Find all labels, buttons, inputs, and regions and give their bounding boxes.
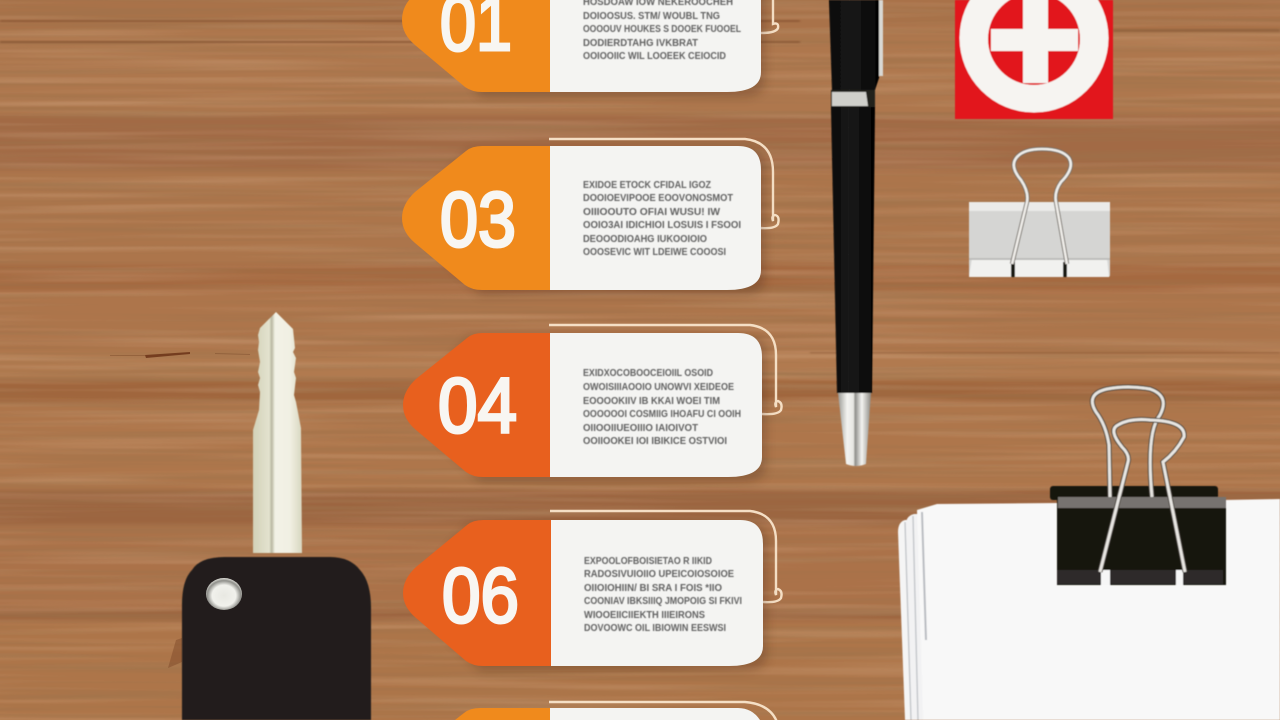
tag 04 number: 04 [438, 361, 517, 449]
tag 01 description [583, 0, 741, 62]
tag 04 description [583, 368, 741, 447]
tag 01 description: OOIOOIIC WIL LOOEEK CEIOCID [583, 51, 726, 62]
tag 04 description: OOIIOOKEI IOI IBIKICE OSTVIOI [583, 436, 727, 447]
tag 04 [403, 333, 762, 477]
tag 06 text card [551, 520, 763, 666]
icon: white binder clip [969, 149, 1110, 277]
tag 04 description: OWOISIIIAOOIO UNOWVI XEIDEOE [583, 382, 734, 393]
key fob [182, 557, 371, 720]
tag 03 number: 03 [440, 175, 516, 263]
tag 03 description [583, 180, 741, 258]
icon: red medical box [955, 0, 1113, 119]
connector wires behind tags [549, 0, 782, 720]
tag 03 description: DEOOODIOAHG IUKOOIOIO [583, 234, 707, 245]
tag 01 number tab [402, 0, 550, 92]
key blade [253, 312, 302, 553]
tag 06 description: OIIOIOHIIN/ BI SRA I FOIS *IIO [584, 583, 722, 594]
tag 06 description: EXPOOLOFBOISIETAO R IIKID [584, 556, 712, 567]
tag 04 text card [550, 333, 762, 477]
tag 06 number tab [403, 520, 551, 666]
tag 06 number: 06 [442, 551, 519, 639]
tag 06 description: COONIAV IBKSIIIQ JMOPOIG SI FKIVI [584, 596, 742, 607]
tag 01 [402, 0, 761, 92]
tag 03 text card [550, 146, 761, 290]
tag 03 description: OOOSEVIC WIT LDEIWE COOOSI [583, 247, 726, 258]
key fob screw [206, 578, 242, 610]
tag 04 description: EXIDXOCOBOOCEIOIIL OSOID [583, 368, 713, 379]
tag 03 description: OIIIOOUTO OFIAI WUSU! IW [583, 207, 721, 218]
tag 07 partially visible [455, 708, 760, 720]
tag 01 text card [550, 0, 761, 92]
tag 03 description: OOIO3AI IDICHIOI LOSUIS I FSOOI [583, 220, 741, 231]
tag 04 description: OOOOOOI COSMIIG IHOAFU CI OOIH [583, 409, 741, 420]
tag 03 description: EXIDOE ETOCK CFIDAL IGOZ [583, 180, 711, 191]
tag 03 description: DOOIOEVIPOOE EOOVONOSMOT [583, 193, 733, 204]
tag 06 description: RADOSIVUIOIIO UPEICOIOSOIOE [584, 569, 734, 580]
tag 04 description: OIIOOIIUEOIIIO IAIOIVOT [583, 423, 698, 434]
tag 06 description: WIOOEIICIIEKTH IIIEIRONS [584, 610, 705, 621]
tag 04 description: EOOOOKIIV IB KKAI WOEI TIM [583, 396, 720, 407]
tag 03 number tab [402, 146, 550, 290]
icon: car key [182, 312, 371, 720]
icon: paper stack [898, 499, 1280, 720]
tag 01 description: OOOOUV HOUKES S DOOEK FUOOEL [583, 24, 741, 35]
tag 04 number tab [403, 333, 550, 477]
tag 03 [402, 146, 761, 290]
tag 01 description: DODIERDTAHG IVKBRAT [583, 38, 698, 49]
tag 06 description: DOVOOWC OIL IBIOWIN EESWSI [584, 623, 726, 634]
icon: black pen [829, 0, 883, 466]
tag shadows [408, 0, 767, 671]
tag 01 description: DOIOOSUS. STM/ WOUBL TNG [583, 11, 720, 22]
icon: black binder clip [1050, 387, 1226, 585]
tag 06 description [584, 556, 742, 634]
tag 06 [403, 520, 763, 666]
